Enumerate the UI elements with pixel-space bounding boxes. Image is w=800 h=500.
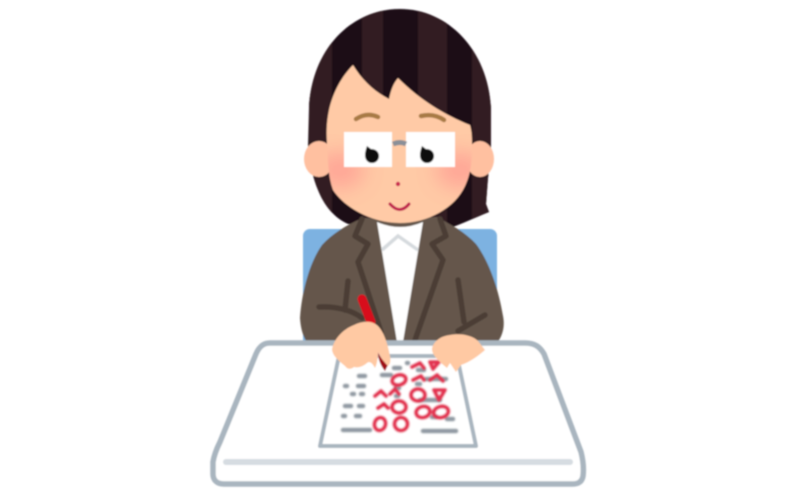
illustration: woman with glasses grading a test at a desk bbox=[210, 8, 587, 488]
chair back bbox=[303, 229, 497, 349]
ears bbox=[304, 141, 334, 177]
jacket sleeve creases bbox=[319, 280, 485, 331]
eyes bbox=[365, 146, 379, 163]
left hand holding pen bbox=[332, 322, 390, 369]
red pen bbox=[362, 299, 388, 371]
nose bbox=[396, 182, 400, 186]
jacket lapels bbox=[355, 219, 446, 340]
blush bbox=[316, 152, 484, 188]
printed text lines bbox=[343, 363, 456, 431]
face bbox=[304, 65, 494, 223]
eyebrows bbox=[356, 115, 378, 119]
red check marks bbox=[373, 362, 450, 432]
jacket bbox=[300, 217, 504, 358]
desk bbox=[213, 343, 583, 484]
hair bbox=[307, 8, 492, 228]
shirt bbox=[377, 222, 423, 342]
glasses bbox=[344, 132, 392, 167]
mouth bbox=[390, 204, 409, 210]
test paper bbox=[320, 356, 476, 446]
right hand bbox=[432, 334, 485, 372]
shirt collar bbox=[382, 236, 418, 250]
